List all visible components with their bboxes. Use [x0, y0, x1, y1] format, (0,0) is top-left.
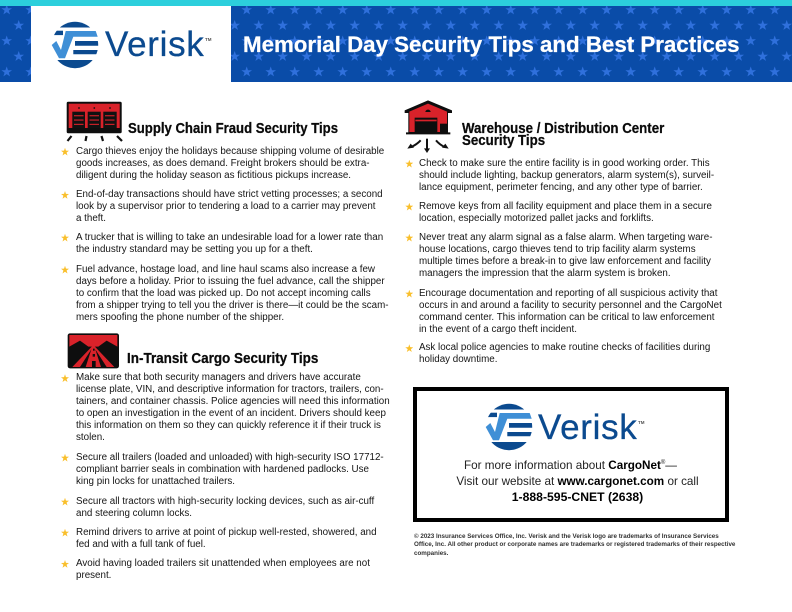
header banner	[0, 0, 792, 82]
bullets: supply chain: Fuel advance, hostage load, and line haul scams also increase a few	[76, 264, 375, 275]
bullets: supply chain	[61, 146, 389, 323]
bullets: in-transit: Secure all tractors with high-security locking devices, such as air-cuff	[76, 496, 374, 507]
bullets: in-transit: Avoid having loaded trailers sit unattended when employees are not	[76, 558, 370, 569]
bullets: warehouse: Never treat any alarm signal as a false alarm. When targeting ware-	[419, 232, 712, 243]
bullets: supply chain: look by a supervisor prior to tendering a load to a carrier may prevent	[76, 201, 376, 212]
heading: warehouse: Warehouse / Distribution Center	[462, 121, 664, 137]
bullets: in-transit: stolen.	[76, 432, 105, 443]
bullets: in-transit: Secure all trailers (loaded and unloaded) with high-security ISO 17712-	[76, 452, 384, 463]
logo: Verisk callout: TM	[638, 420, 644, 425]
bullets: supply chain: days before a holiday. Prior to issuing the fuel advance, call the shipper	[76, 276, 385, 287]
bullets: warehouse: multiple times before a break-in to give law enforcement and facility	[419, 256, 711, 267]
bullets: warehouse: Encourage documentation and reporting of all suspicious activity that	[419, 288, 717, 299]
bullets: warehouse: Ask local police agencies to make routine checks of facilities during	[419, 342, 710, 353]
bullets: warehouse: in the event of a cargo theft incident.	[419, 324, 577, 335]
bullets: supply chain: the industry standard may be setting you up for a theft.	[76, 244, 313, 255]
bullets: in-transit: Make sure that both security managers and drivers have accurate	[76, 372, 361, 383]
bullets: supply chain: End-of-day transactions should have strict vetting processes; a second	[76, 189, 383, 200]
bullets: supply chain: diligent during the holiday season as fictitious pickups increase.	[76, 170, 351, 181]
contact text: Visit our website at www.cargonet.com or call	[456, 475, 699, 488]
bullets: supply chain: A trucker that is willing to take an undesirable load for a lower rate than	[76, 232, 383, 243]
bullets: in-transit: Remind drivers to arrive at point of pickup well-rested, showered, and	[76, 527, 377, 538]
bullets: warehouse: Check to make sure the entire facility is in good working order. This	[419, 158, 710, 169]
callout: contact box	[413, 387, 729, 522]
heading: supply chain: Supply Chain Fraud Security Tips	[128, 120, 338, 136]
bullets: in-transit: compliant barrier seals in combination with hardened padlocks. Use	[76, 464, 369, 475]
wordmark: Verisk	[538, 408, 638, 447]
contact text: For more information about CargoNet®—	[464, 459, 677, 472]
bullets: warehouse	[405, 158, 722, 365]
bullets: warehouse: Remove keys from all facility equipment and place them in a secure	[419, 201, 712, 212]
bullets: in-transit: fed and with a full tank of fuel.	[76, 539, 206, 550]
bullets: supply chain: Cargo thieves enjoy the holidays because shipping volume of desirable	[76, 146, 384, 157]
heading: warehouse: Security Tips	[462, 133, 545, 149]
icon: supply chain containers	[66, 102, 123, 142]
bullets: supply chain: from a shipper trying to tell you the driver is there—it could be the scam-	[76, 300, 389, 311]
bullets: in-transit: present.	[76, 570, 111, 581]
copyright: © 2023 Insurance Services Office, Inc. Verisk and the Verisk logo are trademarks of Insurance Services	[414, 533, 719, 540]
heading: in-transit: In-Transit Cargo Security Tips	[127, 350, 318, 366]
bullets: supply chain: goods increases, as does demand. Freight brokers should be extra-	[76, 158, 370, 169]
bullets: warehouse: command center. This information can be critical to law enforcement	[419, 312, 714, 323]
logo: Verisk header	[52, 22, 212, 68]
contact text	[456, 459, 699, 504]
heading: warehouse	[462, 121, 664, 149]
copyright	[414, 533, 736, 557]
bullets: in-transit: license plate, VIN, and descriptive information for tractors, trailers, con-	[76, 384, 384, 395]
bullets: supply chain: mers spoofing the phone number of the shipper.	[76, 312, 284, 323]
bullets: warehouse: house locations, cargo thieves tend to trip facility alarm systems	[419, 244, 696, 255]
logo: Verisk header: TM	[205, 37, 212, 42]
bullets: in-transit: tainers, and container chassis. Police agencies will need this information	[76, 396, 390, 407]
copyright: companies.	[414, 550, 448, 557]
bullets: warehouse: occurs in and around a facility to security personnel and the CargoNet	[419, 300, 722, 311]
bullets: warehouse: location, especially motorized pallet jacks and forklifts.	[419, 213, 654, 224]
logo: Verisk callout	[486, 404, 644, 450]
contact text: 1-888-595-CNET (2638)	[512, 490, 643, 504]
bullets: in-transit: this information on them so they can quickly reference it if their truck is	[76, 420, 381, 431]
bullets: warehouse: holiday downtime.	[419, 354, 497, 365]
bullets: supply chain: to confirm that the load was picked up. Do not accept incoming calls	[76, 288, 371, 299]
wordmark: Verisk	[105, 25, 205, 64]
bullets: warehouse: should include lighting, backup generators, alarm system(s), surveil-	[419, 170, 714, 181]
bullets: warehouse: lance equipment, perimeter fencing, and any other type of barrier.	[419, 182, 703, 193]
bullets: in-transit	[61, 372, 390, 581]
icon: road	[68, 333, 120, 368]
bullets: supply chain: a theft.	[76, 213, 106, 224]
title: Memorial Day Security Tips and Best Practices	[243, 32, 740, 57]
bullets: in-transit: to open an investigation in the event of an incident. Drivers should keep	[76, 408, 386, 419]
bullets: in-transit: and steering column locks.	[76, 508, 192, 519]
bullets: in-transit: king pin locks for unattached trailers.	[76, 476, 235, 487]
bullets: warehouse: managers the impression that the alarm system is broken.	[419, 268, 671, 279]
copyright: Office, Inc. All other product or corporate names are trademarks or registered trademarks of their respective	[414, 541, 735, 548]
icon: warehouse	[404, 100, 452, 153]
